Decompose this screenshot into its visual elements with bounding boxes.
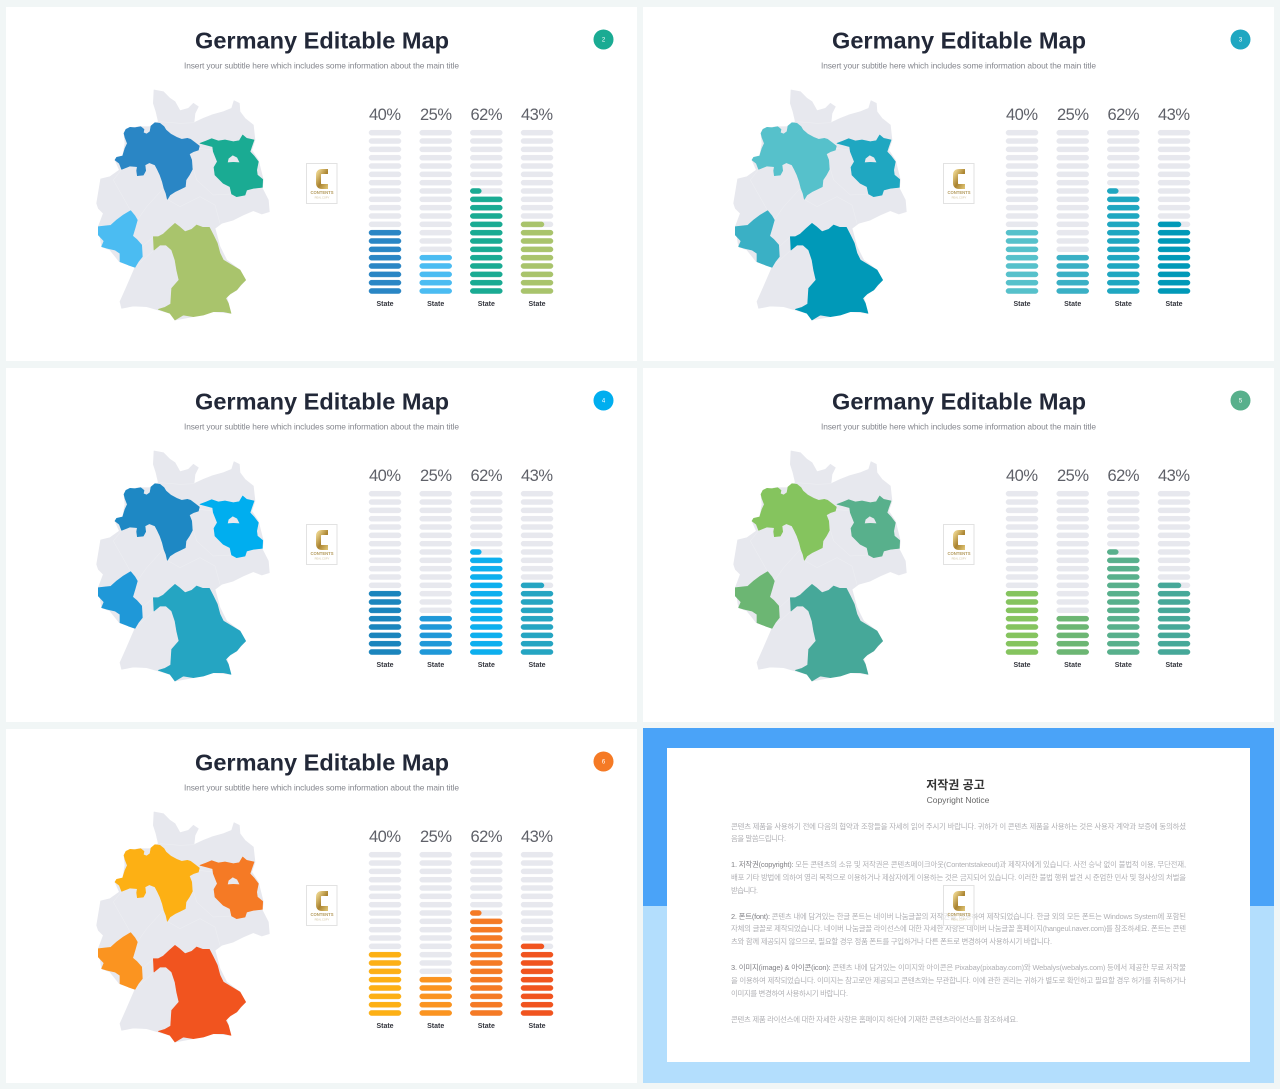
logo: CONTENTS xyxy=(948,190,971,195)
notice heading: 저작권 공고 xyxy=(926,777,985,792)
notice body text: 2. 폰트(font): 콘텐츠 내에 담겨있는 한글 폰트는 네이버 나눔글꼴의 저작권을 허용하여 제작되었습니다. 한글 외의 모든 폰트는 Windows System에 포함된 xyxy=(731,912,1186,921)
subtitle: Insert your subtitle here which includes some information about the main title xyxy=(821,60,1096,70)
bar chart: 40% xyxy=(369,106,401,124)
bar chart: State xyxy=(427,301,444,308)
bar chart: 43% xyxy=(1158,467,1190,485)
subtitle: Insert your subtitle here which includes some information about the main title xyxy=(184,60,459,70)
bar chart: State xyxy=(478,662,495,669)
panel: copyright notice xyxy=(643,728,1274,1083)
notice body text: 받습니다. xyxy=(731,886,758,895)
bar chart: 43% xyxy=(521,828,553,846)
bar chart: 25% xyxy=(420,106,452,124)
logo xyxy=(944,524,974,564)
bar chart xyxy=(369,467,553,669)
page badge: 5 xyxy=(1239,399,1243,405)
bar chart xyxy=(369,828,553,1030)
bar chart: State xyxy=(478,1023,495,1030)
notice body text xyxy=(731,822,1186,1024)
map of Germany xyxy=(97,812,269,1042)
logo: CONTENTS xyxy=(948,912,971,917)
logo xyxy=(306,524,337,564)
logo xyxy=(306,164,337,204)
bar chart: 40% xyxy=(369,467,401,485)
subtitle: Insert your subtitle here which includes some information about the main title xyxy=(821,422,1096,432)
bar chart: State xyxy=(528,1023,546,1030)
bar chart: State xyxy=(1115,662,1132,669)
bar chart: State xyxy=(1064,662,1081,669)
subtitle: Insert your subtitle here which includes some information about the main title xyxy=(184,782,459,792)
page badge: 3 xyxy=(1239,38,1243,44)
bar chart: State xyxy=(376,301,394,308)
title: Germany Editable Map xyxy=(832,388,1086,414)
notice body text: 콘텐츠 제품을 사용하기 전에 다음의 협약과 조항들을 자세히 읽어 주시기 바랍니다. 귀하가 이 콘텐츠 제품을 사용하는 것은 사용자 계약과 보증에 동의하셨 xyxy=(731,822,1186,831)
logo: REAL COPY xyxy=(952,918,967,922)
map of Germany xyxy=(97,90,269,320)
bar chart: State xyxy=(1064,301,1081,308)
panel: slide 2, multicolour xyxy=(6,7,637,361)
panel: slide 5, green xyxy=(643,368,1274,722)
bar chart: 62% xyxy=(1108,467,1140,485)
bar chart: State xyxy=(376,1023,394,1030)
bar chart: 40% xyxy=(1006,106,1038,124)
bar chart: 40% xyxy=(369,828,401,846)
logo xyxy=(944,164,974,204)
bar chart: State xyxy=(1165,662,1183,669)
notice subheading: Copyright Notice xyxy=(927,795,990,805)
page badge xyxy=(1230,30,1250,50)
logo xyxy=(944,886,974,926)
bar chart: State xyxy=(1013,662,1031,669)
bar chart: 62% xyxy=(470,106,503,124)
bar chart: 43% xyxy=(521,106,553,124)
logo: CONTENTS xyxy=(948,551,971,556)
notice body text: 3. 이미지(image) & 아이콘(icon): 콘텐츠 내에 담겨있는 이미지와 아이콘은 Pixabay(pixabay.com)와 Webalys(webalys.com) 등에서 제공한 무료 저작물 xyxy=(731,963,1186,972)
panel: slide 4, blue xyxy=(6,368,637,722)
title: Germany Editable Map xyxy=(832,28,1086,54)
bar chart: State xyxy=(427,662,444,669)
bar chart: State xyxy=(528,301,546,308)
page badge: 4 xyxy=(602,399,606,405)
subtitle: Insert your subtitle here which includes some information about the main title xyxy=(184,422,459,432)
map of Germany xyxy=(734,90,906,320)
bar chart: 43% xyxy=(1158,106,1190,124)
notice body text: 자체의 글꼴로 제작되었습니다. 네이버 나눔글꼴 라이선스에 대한 자세한 사항은 네이버 나눔글꼴 홈페이지(hangeul.naver.com)를 참조하세요. 폰트는 콘텐 xyxy=(731,924,1186,933)
page badge xyxy=(594,390,614,410)
logo: REAL COPY xyxy=(315,918,330,922)
map of Germany xyxy=(734,451,906,681)
notice body text: 1. 저작권(copyright): 모든 콘텐츠의 소유 및 저작권은 콘텐츠메이크아웃(Contentstakeout)과 제작자에게 있습니다. 사전 승낙 없이 불법적 이용, 무단전재, xyxy=(731,860,1186,869)
notice body text: 을 이용하여 제작되었습니다. 이미지는 참고로만 제공되고 콘텐츠와는 무관합니다. 이에 관한 권리는 귀하가 별도로 확인하고 필요할 경우 허가를 취득하거나 xyxy=(731,976,1186,985)
title: Germany Editable Map xyxy=(195,28,449,54)
logo: CONTENTS xyxy=(310,551,334,556)
page badge: 2 xyxy=(602,38,606,44)
logo: REAL COPY xyxy=(952,196,967,200)
panel: slide 3, teal xyxy=(643,7,1274,361)
notice body text: 음을 말씀드립니다. xyxy=(731,834,786,843)
notice body text: 이미지를 변경하여 사용하시기 바랍니다. xyxy=(731,989,848,998)
panel: slide 6, orange xyxy=(6,729,637,1083)
logo: REAL COPY xyxy=(315,556,330,560)
bar chart: State xyxy=(1165,301,1183,308)
map of Germany xyxy=(97,451,269,681)
logo: REAL COPY xyxy=(952,556,967,560)
bar chart: 25% xyxy=(1057,467,1089,485)
logo: REAL COPY xyxy=(315,196,330,200)
bar chart: 43% xyxy=(521,467,553,485)
bar chart: State xyxy=(376,662,394,669)
bar chart: State xyxy=(1013,301,1031,308)
bar chart: 62% xyxy=(1108,106,1140,124)
bar chart: 62% xyxy=(470,828,503,846)
bar chart: State xyxy=(1115,301,1132,308)
bar chart xyxy=(369,106,553,308)
notice body text: 콘텐츠 제품 라이선스에 대한 자세한 사항은 홈페이지 하단에 기재한 콘텐츠라이선스를 참조하세요. xyxy=(731,1015,1018,1024)
logo xyxy=(306,886,337,926)
bar chart: State xyxy=(528,662,546,669)
bar chart: 25% xyxy=(420,828,452,846)
bar chart xyxy=(1006,106,1190,308)
notice body text: 츠와 함께 제공되지 않으므로, 필요할 경우 정품 폰트를 구입하거나 다른 폰트로 변경하여 사용하시기 바랍니다. xyxy=(731,937,1052,946)
bar chart xyxy=(1006,467,1190,669)
bar chart: State xyxy=(478,301,495,308)
bar chart: State xyxy=(427,1023,444,1030)
bar chart: 40% xyxy=(1006,467,1038,485)
page badge xyxy=(594,30,614,50)
page badge xyxy=(594,752,614,772)
page badge xyxy=(1230,390,1250,410)
title: Germany Editable Map xyxy=(195,750,449,776)
page badge: 6 xyxy=(602,760,606,766)
bar chart: 25% xyxy=(1057,106,1089,124)
bar chart: 62% xyxy=(470,467,503,485)
logo: CONTENTS xyxy=(310,912,334,917)
title: Germany Editable Map xyxy=(195,388,449,414)
logo: CONTENTS xyxy=(310,190,334,195)
bar chart: 25% xyxy=(420,467,452,485)
notice body text: 배포 기타 방법에 의하여 영리 목적으로 이용하거나 제삼자에게 이용하는 것은 금지되어 있습니다. 이러한 불법 행위 발견 시 준엄한 민사 및 형사상의 처벌을 xyxy=(731,873,1186,882)
